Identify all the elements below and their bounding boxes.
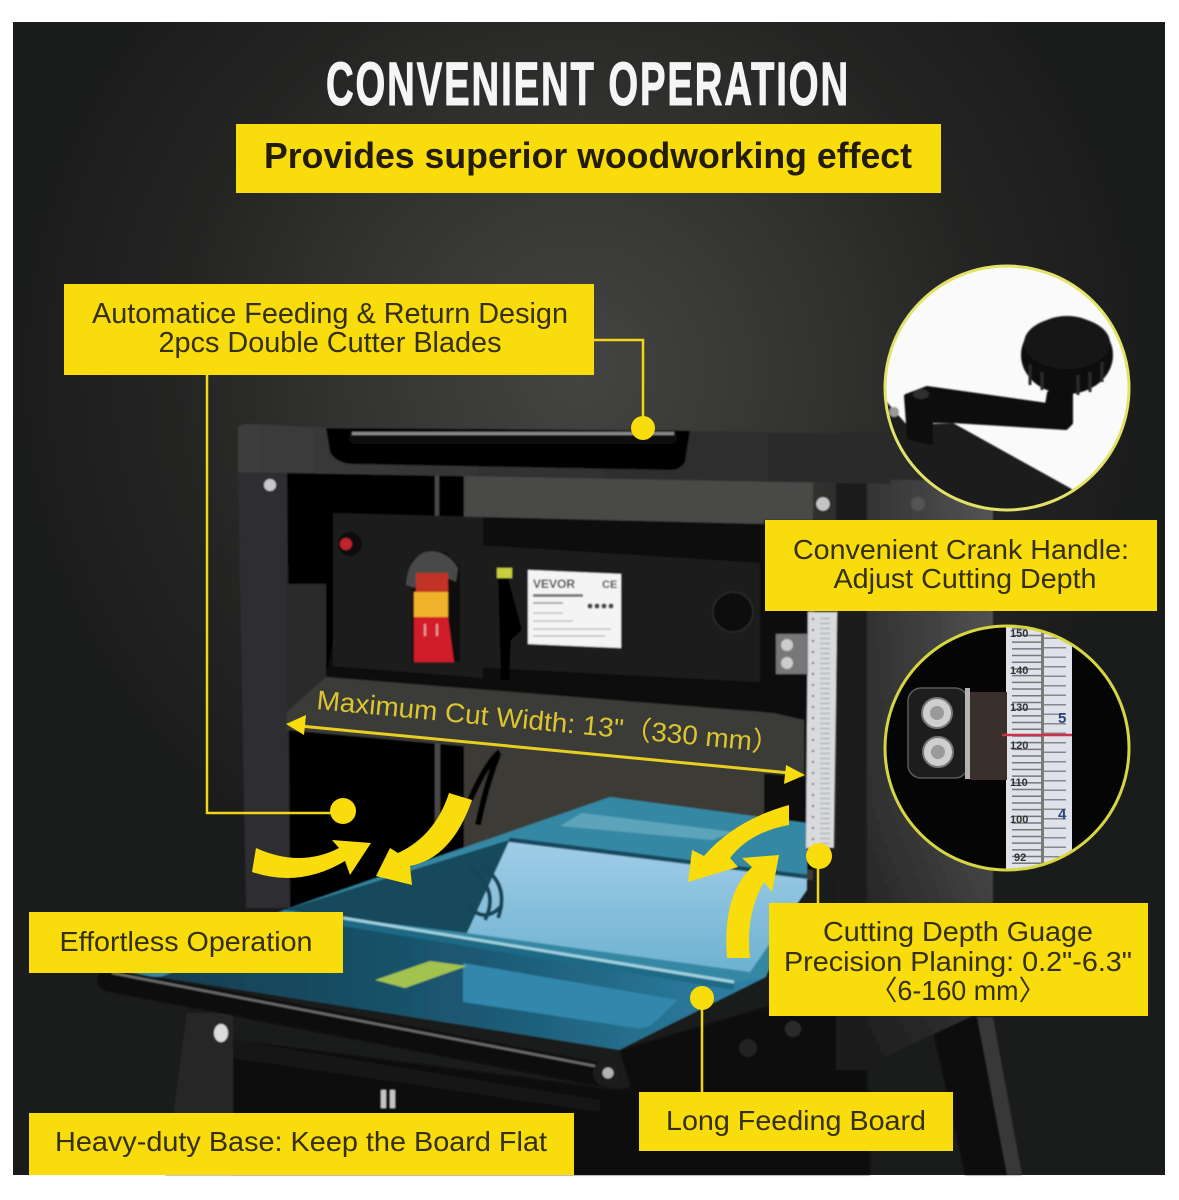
- board outline: [110, 797, 807, 1050]
- side bolt: [816, 497, 830, 511]
- callout: long feeding board: Long Feeding Board: [666, 1105, 926, 1136]
- cut width plate: [287, 677, 804, 777]
- connector dots: [330, 416, 832, 1010]
- feed board roller: [109, 973, 619, 1086]
- cable: [470, 752, 500, 825]
- see-through section: [284, 840, 509, 933]
- depth gauge inset: 120: [1010, 740, 1028, 752]
- green tag: [375, 961, 467, 988]
- column bolt: [264, 479, 276, 491]
- depth gauge inset: 92: [1014, 852, 1026, 864]
- back wall: [463, 475, 813, 575]
- board rail: [343, 918, 734, 982]
- crank handle inset: [885, 266, 1129, 512]
- under-board base: [165, 1000, 870, 1175]
- red indicator: [338, 532, 362, 556]
- board cables: [467, 866, 502, 920]
- rear board panel: [560, 813, 734, 840]
- title: CONVENIENT OPERATION: [326, 50, 850, 118]
- callout: heavy-duty base: Heavy-duty Base: Keep the Board Flat: [55, 1126, 547, 1157]
- right side leg: [930, 1017, 1022, 1175]
- lower back wall: [463, 730, 813, 880]
- left inner block: [287, 584, 326, 730]
- inner guide rods: [435, 475, 440, 835]
- callout: crank handle: Adjust Cutting Depth: [834, 563, 1096, 594]
- callout: depth gauge: [769, 903, 1148, 1016]
- callout: effortless operation: Effortless Operation: [60, 926, 312, 957]
- callout: heavy-duty base: [29, 1113, 574, 1175]
- connector lines: [207, 340, 818, 1092]
- callout: depth gauge: 〈6-160 mm〉: [870, 975, 1046, 1006]
- subtitle banner: [236, 124, 941, 193]
- callout: effortless operation: [29, 912, 343, 973]
- yellow feed arrows: [252, 793, 789, 958]
- callout: depth gauge: Precision Planing: 0.2"-6.3": [784, 946, 1132, 977]
- handle recess: [326, 428, 690, 470]
- control panel left: [333, 513, 483, 678]
- depth gauge inset: 140: [1010, 665, 1028, 677]
- depth gauge inset: [885, 625, 1129, 875]
- depth ruler on machine: [806, 612, 837, 848]
- VEVOR label: VEVOR: [533, 577, 575, 591]
- depth gauge inset: 110: [1010, 777, 1028, 789]
- depth gauge inset: 130: [1010, 702, 1028, 714]
- power switch: [406, 551, 460, 662]
- top handle rod: [349, 431, 677, 444]
- feeding board: [110, 797, 807, 1050]
- light board panel: [467, 842, 807, 972]
- depth gauge inset: 100: [1010, 814, 1028, 826]
- callout: crank handle: [765, 520, 1157, 611]
- callout: feeding design: 2pcs Double Cutter Blades: [158, 327, 502, 359]
- vertical latch: [497, 568, 522, 680]
- callout: depth gauge: Cutting Depth Guage: [823, 916, 1093, 947]
- base bolts: [214, 1021, 801, 1108]
- ruler bracket: [776, 634, 808, 674]
- top cover: [238, 424, 890, 484]
- left column: [238, 470, 290, 908]
- subtitle banner: Provides superior woodworking effect: [264, 135, 912, 176]
- right side body: [836, 432, 993, 1070]
- callout: long feeding board: [639, 1092, 953, 1151]
- machine: planer body: [109, 424, 1022, 1175]
- depth gauge inset: 150: [1010, 628, 1028, 640]
- width label: Maximum Cut Width: 13"（330 mm）: [315, 685, 781, 759]
- callout: crank handle: Convenient Crank Handle:: [793, 534, 1129, 565]
- callout: feeding design: [64, 284, 594, 375]
- VEVOR label: CE: [602, 579, 617, 591]
- VEVOR label: [528, 570, 621, 648]
- round knob: [713, 592, 753, 632]
- board dark crease: [509, 840, 807, 877]
- board lower section: [160, 918, 766, 1050]
- depth gauge inset: 4: [1058, 806, 1067, 823]
- width arrow: [286, 715, 805, 784]
- inner cavity: [284, 472, 814, 912]
- depth gauge inset: 5: [1058, 710, 1066, 727]
- lower panel: [463, 963, 678, 1028]
- control panel right: [475, 545, 760, 682]
- callout: feeding design: Automatice Feeding & Return Design: [92, 298, 568, 330]
